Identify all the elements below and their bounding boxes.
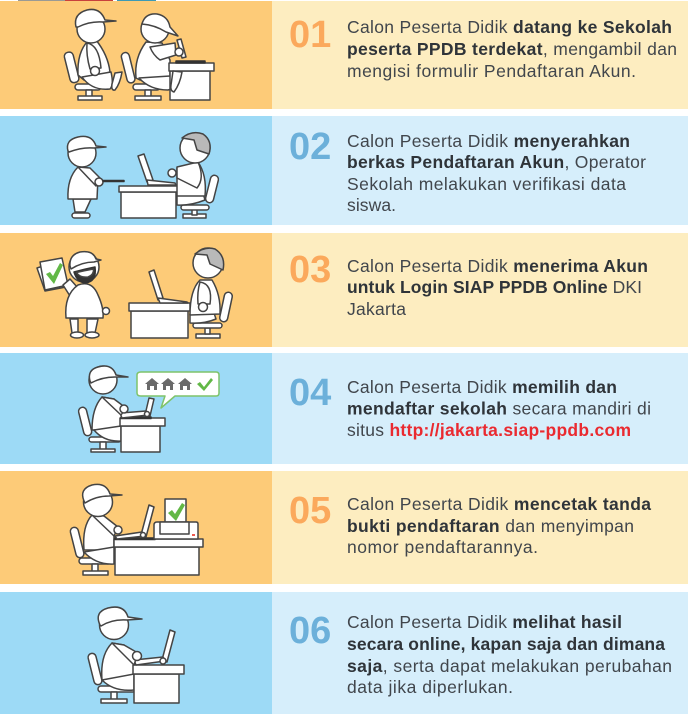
description 04: situs http://jakarta.siap-ppdb.com bbox=[347, 420, 631, 440]
illustration: student choosing school online bbox=[78, 366, 219, 452]
illustration background 01 bbox=[0, 1, 272, 109]
panel: step 03 bbox=[0, 233, 688, 347]
text background 05 bbox=[272, 471, 688, 584]
description 06: data jika diperlukan. bbox=[347, 677, 513, 697]
text background 03 bbox=[272, 233, 688, 347]
text background 04 bbox=[272, 353, 688, 464]
description 02: Sekolah melakukan verifikasi data bbox=[347, 174, 626, 194]
description 06: Calon Peserta Didik melihat hasil bbox=[347, 612, 622, 632]
illustration: student handing documents to operator bbox=[67, 133, 219, 218]
illustration: happy student holding account letter bbox=[37, 248, 233, 338]
illustration background 04 bbox=[0, 353, 272, 464]
illustration: student filling in form at desk bbox=[63, 9, 214, 100]
panel: step 05 bbox=[0, 471, 688, 584]
description 06: saja, serta dapat melakukan perubahan bbox=[347, 656, 672, 676]
illustration background 06 bbox=[0, 592, 272, 714]
number 05: 05 bbox=[289, 490, 331, 532]
description 02: berkas Pendaftaran Akun, Operator bbox=[347, 152, 646, 172]
panel: step 04 bbox=[0, 353, 688, 464]
illustration: student checking results on laptop bbox=[87, 607, 184, 703]
description 03: Calon Peserta Didik menerima Akun bbox=[347, 256, 648, 276]
number 06: 06 bbox=[289, 610, 331, 652]
number 01: 01 bbox=[289, 14, 331, 56]
illustration background 02 bbox=[0, 116, 272, 225]
cropped header strip bbox=[18, 0, 156, 1]
description 05 bbox=[347, 494, 651, 557]
illustration: student printing registration proof bbox=[69, 484, 203, 575]
text background 02 bbox=[272, 116, 688, 225]
text background 06 bbox=[272, 592, 688, 714]
text background 01 bbox=[272, 1, 688, 109]
description 02: siswa. bbox=[347, 195, 396, 215]
panel: step 01 bbox=[0, 1, 688, 109]
illustration background 03 bbox=[0, 233, 272, 347]
panel: step 06 bbox=[0, 592, 688, 714]
description 05: nomor pendaftarannya. bbox=[347, 537, 538, 557]
description 03: Jakarta bbox=[347, 299, 406, 319]
number 03: 03 bbox=[289, 249, 331, 291]
description 01: mengisi formulir Pendaftaran Akun. bbox=[347, 61, 636, 81]
description 03: untuk Login SIAP PPDB Online DKI bbox=[347, 277, 642, 297]
description 01 bbox=[347, 17, 677, 81]
description 06: secara online, kapan saja dan dimana bbox=[347, 634, 665, 654]
description 03 bbox=[347, 256, 648, 319]
speech bubble with houses and check bbox=[137, 372, 219, 408]
description 01: peserta PPDB terdekat, mengambil dan bbox=[347, 39, 677, 59]
description 04: mendaftar sekolah secara mandiri di bbox=[347, 398, 651, 418]
description 04 bbox=[347, 377, 651, 440]
panel: step 02 bbox=[0, 116, 688, 225]
description 05: Calon Peserta Didik mencetak tanda bbox=[347, 494, 651, 514]
description 04: Calon Peserta Didik memilih dan bbox=[347, 377, 617, 397]
description 05: bukti pendaftaran dan menyimpan bbox=[347, 516, 634, 536]
number 04: 04 bbox=[289, 372, 331, 414]
description 01: Calon Peserta Didik datang ke Sekolah bbox=[347, 17, 672, 37]
description 02: Calon Peserta Didik menyerahkan bbox=[347, 131, 630, 151]
illustration background 05 bbox=[0, 471, 272, 584]
number 02: 02 bbox=[289, 126, 331, 168]
description 02 bbox=[347, 131, 646, 215]
description 06 bbox=[347, 612, 672, 697]
